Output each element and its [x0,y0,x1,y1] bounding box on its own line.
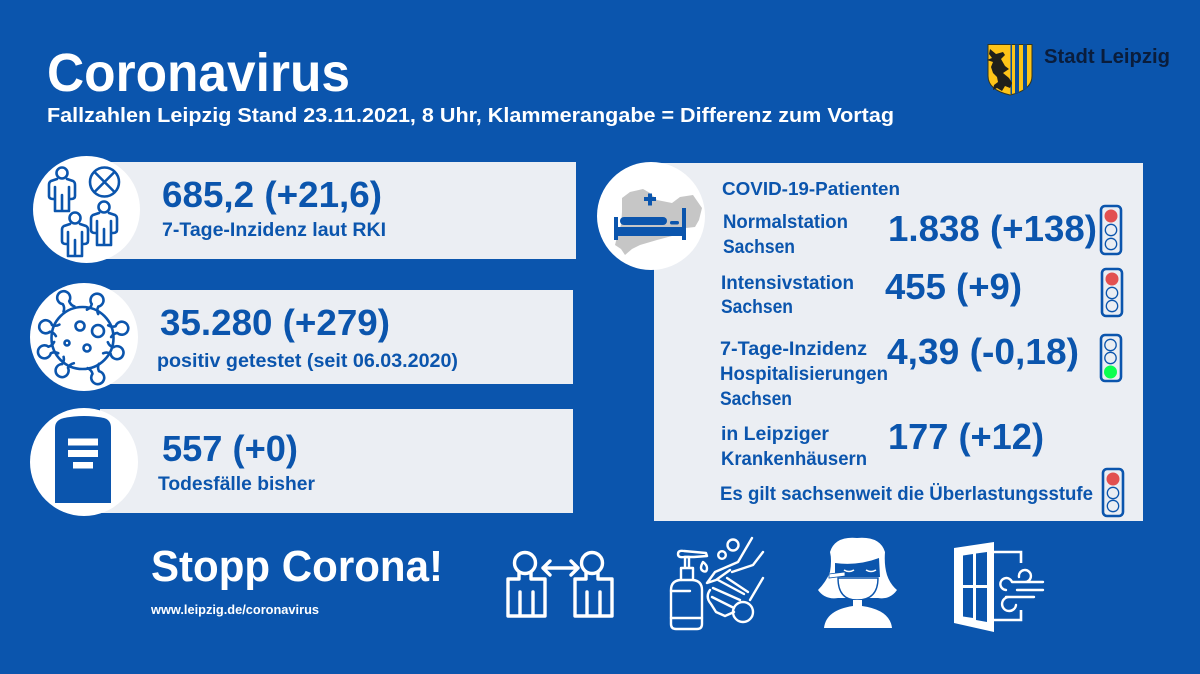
icon: face mask [818,538,897,628]
row: Normalstation: Sachsen [723,237,795,258]
panel background [100,290,573,384]
panel background [100,409,573,513]
row: hospitalisation incidence [720,331,1079,410]
row: Normalstation: Normalstation [723,212,848,233]
label: positiv getestet (seit 06.03.2020) [157,351,458,372]
panel: positive tests [30,283,573,391]
link: www.leipzig.de/coronavirus [150,603,319,617]
panel: deaths [30,408,573,516]
panel: incidence [33,156,576,263]
value: 557 (+0) [162,428,298,469]
label: 7-Tage-Inzidenz laut RKI [162,220,386,241]
icon: open window [954,542,1043,632]
icon: virus [30,283,138,391]
row: Leipzig hospitals [721,416,1044,470]
row: hospitalisation incidence: 7-Tage-Inzidenz [720,339,867,360]
label: Todesfälle bisher [158,474,316,495]
icon: gravestone [30,408,138,516]
icon: traffic light red [1102,269,1122,316]
value: 685,2 (+21,6) [162,174,382,215]
icon: traffic light green [1101,335,1121,381]
heading: COVID-19-Patienten [722,178,900,199]
logo text: Stadt Leipzig [1044,46,1170,68]
row: Intensivstation [721,266,1022,318]
row: Intensivstation: Intensivstation [721,273,854,294]
icon: traffic light red [1103,469,1123,516]
row: Leipzig hospitals: in Leipziger [721,424,830,445]
row: hospitalisation incidence: Sachsen [720,389,792,410]
row: hospitalisation incidence: 4,39 (-0,18) [887,331,1079,372]
icon: coat of arms [987,44,1032,95]
subtitle: Fallzahlen Leipzig Stand 23.11.2021, 8 Uhr, Klammerangabe = Differenz zum Vortag [47,105,894,127]
row: Intensivstation: Sachsen [721,297,793,318]
icon: people and cross [33,156,140,263]
title: Coronavirus [47,43,350,103]
slogan: Stopp Corona! [151,542,443,591]
logo: Stadt Leipzig [987,44,1170,95]
row: hospitalisation incidence: Hospitalisierungen [720,364,888,385]
row: Intensivstation: 455 (+9) [885,266,1022,307]
icon: bed over Saxony map [597,162,705,270]
icon: hand washing [671,538,763,629]
row: Normalstation: 1.838 (+138) [888,208,1097,249]
row: Normalstation [723,208,1097,258]
row: Leipzig hospitals: Krankenhäusern [721,449,867,470]
row: Leipzig hospitals: 177 (+12) [888,416,1044,457]
icon: distance [508,552,612,616]
value: 35.280 (+279) [160,302,390,343]
panel background [650,163,1143,521]
icon: traffic light red [1101,206,1121,254]
panel: COVID-19 patients [597,162,1143,521]
panel background [100,162,576,259]
note: Es gilt sachsenweit die Überlastungsstufe [720,484,1093,505]
